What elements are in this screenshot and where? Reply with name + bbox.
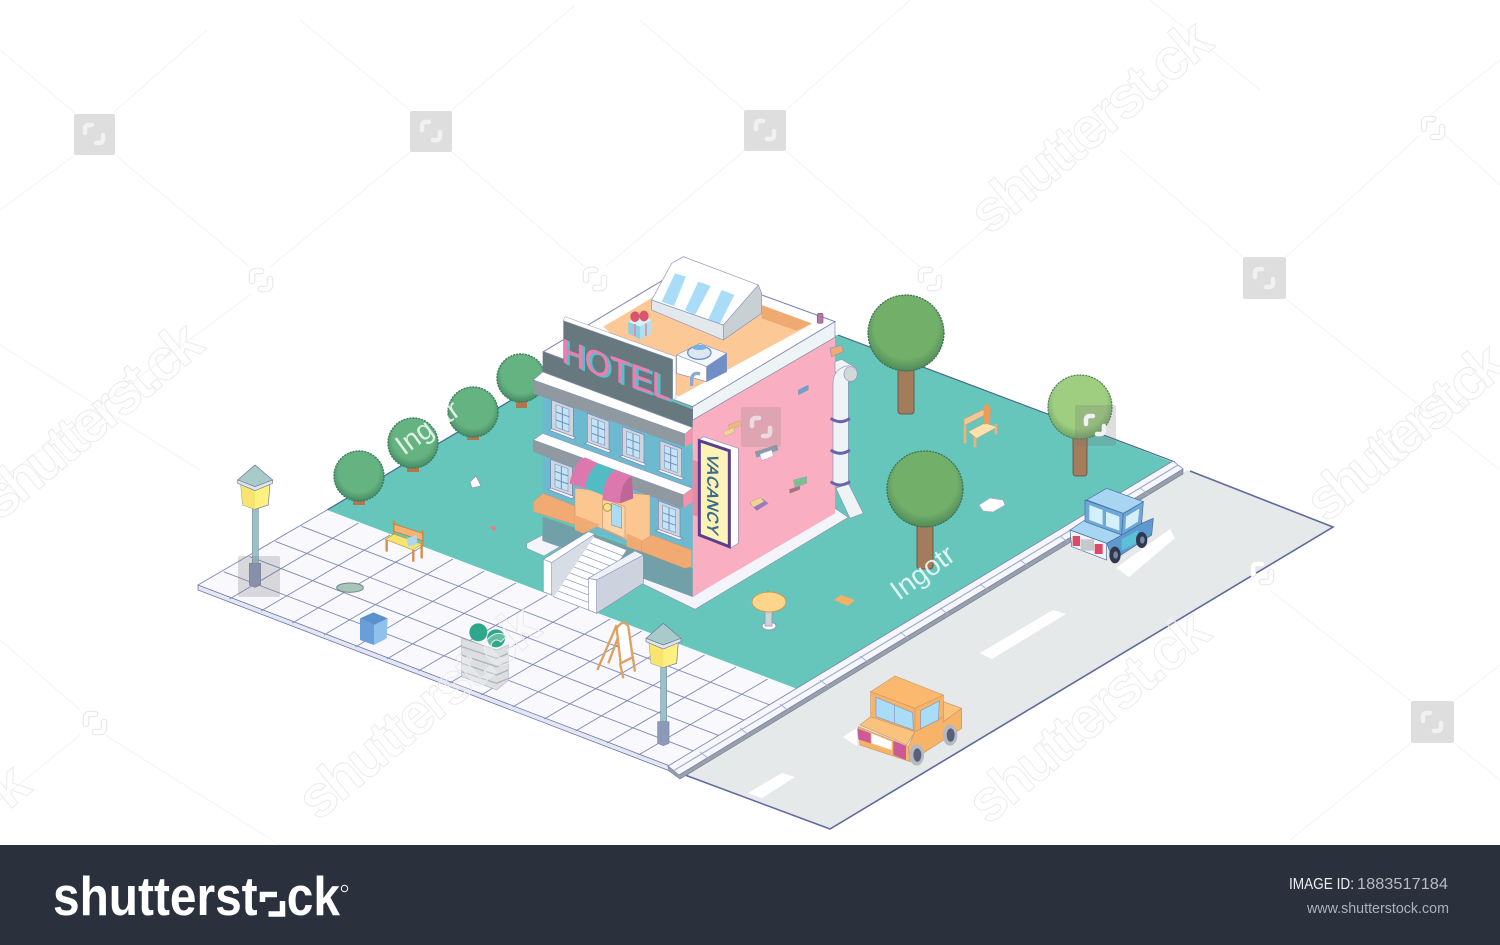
tree large front (887, 451, 963, 569)
pink side wall (693, 337, 835, 597)
watermark square logo marks (85, 121, 1441, 731)
plinth (527, 508, 848, 609)
wall bricks (723, 385, 808, 511)
tree large back (868, 295, 944, 414)
skylight (652, 257, 762, 340)
watermark square on wall (741, 407, 781, 447)
author watermarks: Ingotr (389, 394, 465, 461)
image id: IMAGE ID: (1289, 876, 1354, 893)
tree right light (1048, 375, 1112, 476)
striped awning (569, 457, 633, 503)
upper ledge (533, 372, 693, 447)
footer bar (0, 845, 1500, 945)
lower ledge (533, 433, 693, 508)
lawn litter: rocks and papers (470, 476, 1005, 606)
shutterstock logo: shutterstock (53, 865, 340, 927)
bench on lawn (964, 403, 997, 447)
entrance stairs (543, 532, 643, 613)
stock watermarks: shutterst.ck (955, 596, 1223, 836)
grass lawn (327, 335, 1175, 690)
drain pipe (830, 345, 863, 518)
bench on sidewalk (385, 521, 423, 562)
lamp left (238, 465, 273, 587)
roof parapet (543, 267, 835, 420)
stock watermarks: shutterst.ck (285, 592, 553, 832)
chimney cap (817, 313, 823, 323)
air conditioner unit (677, 343, 727, 386)
manhole (337, 583, 363, 592)
foundation (543, 517, 693, 597)
road (685, 470, 1333, 829)
a-frame sign (597, 623, 635, 678)
vacancy lettering: VACANCY (704, 452, 720, 537)
gift box on roof (628, 311, 652, 339)
lower windows (548, 459, 682, 540)
blue front wall (543, 393, 693, 567)
image id: 1883517184 (1357, 876, 1448, 893)
round table (752, 590, 786, 630)
hotel sign (561, 317, 676, 410)
stock watermarks: shutterst.ck (957, 6, 1225, 246)
sidewalk tiles (198, 510, 799, 771)
orange car (857, 676, 962, 766)
faint outline logo marks (86, 119, 1442, 732)
author watermarks: Ingotr (884, 539, 960, 606)
entrance and planter boxes (533, 488, 692, 568)
hotel sign lettering: HOTEL (561, 332, 670, 409)
gray watermark squares (74, 110, 1454, 743)
blue car (1070, 488, 1153, 563)
hotel sign lettering: HOTEL (564, 333, 672, 410)
hotel building (527, 257, 863, 613)
planter (462, 623, 508, 690)
lamp right (646, 623, 681, 746)
website url: www.shutterstock.com (1306, 901, 1449, 917)
trees behind hotel: hedge bushes (334, 354, 545, 505)
vehicles (857, 488, 1153, 766)
upper windows (549, 400, 684, 480)
street furniture on sidewalk (238, 465, 681, 746)
author watermarks (389, 394, 960, 606)
image id (1289, 876, 1448, 893)
vacancy sign (693, 437, 738, 548)
curb (668, 461, 1183, 779)
trash bin (360, 612, 388, 645)
upper fascia (543, 352, 693, 428)
